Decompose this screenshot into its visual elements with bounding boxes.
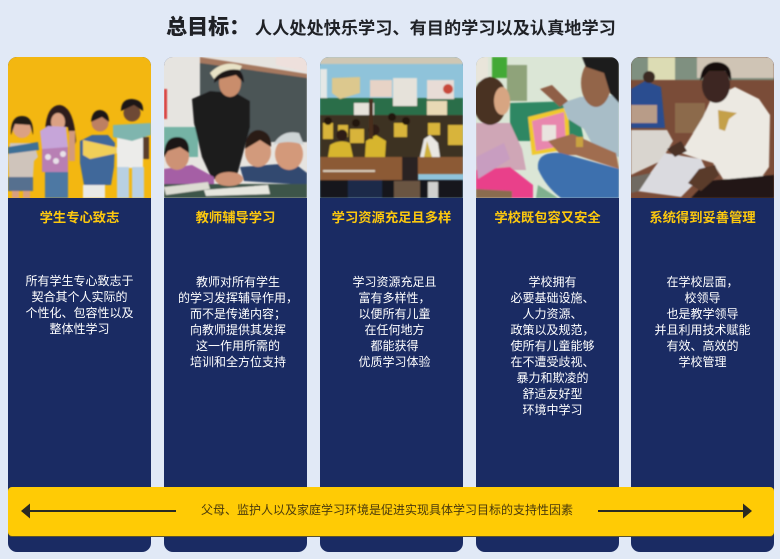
body text: 在不遭受歧视、 bbox=[510, 355, 594, 369]
body text: 必要基础设施、 bbox=[510, 291, 594, 305]
body text: 暴力和欺凌的 bbox=[516, 371, 588, 385]
photo: children reading against yellow wall bbox=[8, 57, 151, 198]
body text: 政策以及规范， bbox=[510, 323, 594, 337]
body text: 学校管理 bbox=[678, 355, 726, 369]
body text: 有效、高效的 bbox=[666, 339, 738, 353]
body text bbox=[352, 275, 436, 369]
kid 4 bbox=[117, 137, 143, 168]
photo: teacher with children bbox=[164, 57, 307, 198]
body text: 在学校层面， bbox=[666, 275, 738, 289]
body text: 舒适友好型 bbox=[522, 387, 582, 401]
body text: 人力资源、 bbox=[522, 307, 582, 321]
body text: 优质学习体验 bbox=[358, 355, 430, 369]
body text bbox=[178, 275, 298, 369]
body text: 培训和全方位支持 bbox=[190, 355, 286, 369]
body text: 所有学生专心致志于 bbox=[25, 274, 134, 288]
body text: 的学习发挥辅导作用， bbox=[178, 291, 298, 305]
body text: 教师对所有学生 bbox=[196, 275, 280, 289]
heading: 教师辅导学习 bbox=[196, 210, 275, 225]
arrow: left bbox=[21, 504, 176, 518]
body text: 这一作用所需的 bbox=[196, 339, 280, 353]
body text: 学习资源充足且 bbox=[352, 275, 436, 289]
panel: learning resources bbox=[320, 57, 463, 552]
kid 3 bbox=[80, 135, 115, 185]
heading: 系统得到妥善管理 bbox=[649, 210, 756, 225]
body text: 而不是传递内容； bbox=[190, 307, 286, 321]
arrow: right bbox=[598, 504, 752, 518]
body text: 向教师提供其发挥 bbox=[190, 323, 286, 337]
panel: students focused bbox=[8, 57, 151, 552]
body text: 契合其个人实际的 bbox=[31, 290, 128, 304]
panel: inclusive and safe school bbox=[476, 57, 619, 552]
body text bbox=[25, 274, 134, 336]
photo: school leader at desk bbox=[631, 57, 774, 198]
banner text: 父母、监护人以及家庭学习环境是促进实现具体学习目标的支持性因素 bbox=[201, 503, 573, 517]
body text: 学校拥有 bbox=[528, 275, 576, 289]
body text: 也是教学领导 bbox=[666, 307, 738, 321]
body text: 富有多样性， bbox=[358, 291, 430, 305]
panel: teachers guide learning bbox=[164, 57, 307, 552]
body text: 都能获得 bbox=[370, 339, 418, 353]
title: 总目标： 人人处处快乐学习、有目的学习以及认真地学习 bbox=[166, 16, 616, 39]
body text: 整体性学习 bbox=[49, 322, 110, 336]
body text: 在任何地方 bbox=[364, 323, 424, 337]
body text bbox=[654, 275, 750, 369]
body text bbox=[510, 275, 594, 417]
heading: 学习资源充足且多样 bbox=[332, 210, 451, 225]
banner: supporting factors bbox=[8, 487, 774, 536]
panel: well-managed system bbox=[631, 57, 774, 552]
body text: 使所有儿童能够 bbox=[510, 339, 594, 353]
body text: 以便所有儿童 bbox=[358, 307, 430, 321]
photo: classroom with pupils in yellow bbox=[320, 57, 463, 198]
kid 2 bbox=[45, 105, 76, 155]
photo: girl and man with picture card bbox=[476, 57, 619, 198]
body text: 个性化、包容性以及 bbox=[25, 306, 134, 320]
body text: 并且利用技术赋能 bbox=[654, 323, 750, 337]
heading: 学生专心致志 bbox=[40, 210, 119, 225]
heading: 学校既包容又安全 bbox=[494, 210, 601, 225]
kid 1 bbox=[8, 143, 38, 177]
body text: 校领导 bbox=[684, 291, 720, 305]
body text: 环境中学习 bbox=[522, 403, 582, 417]
